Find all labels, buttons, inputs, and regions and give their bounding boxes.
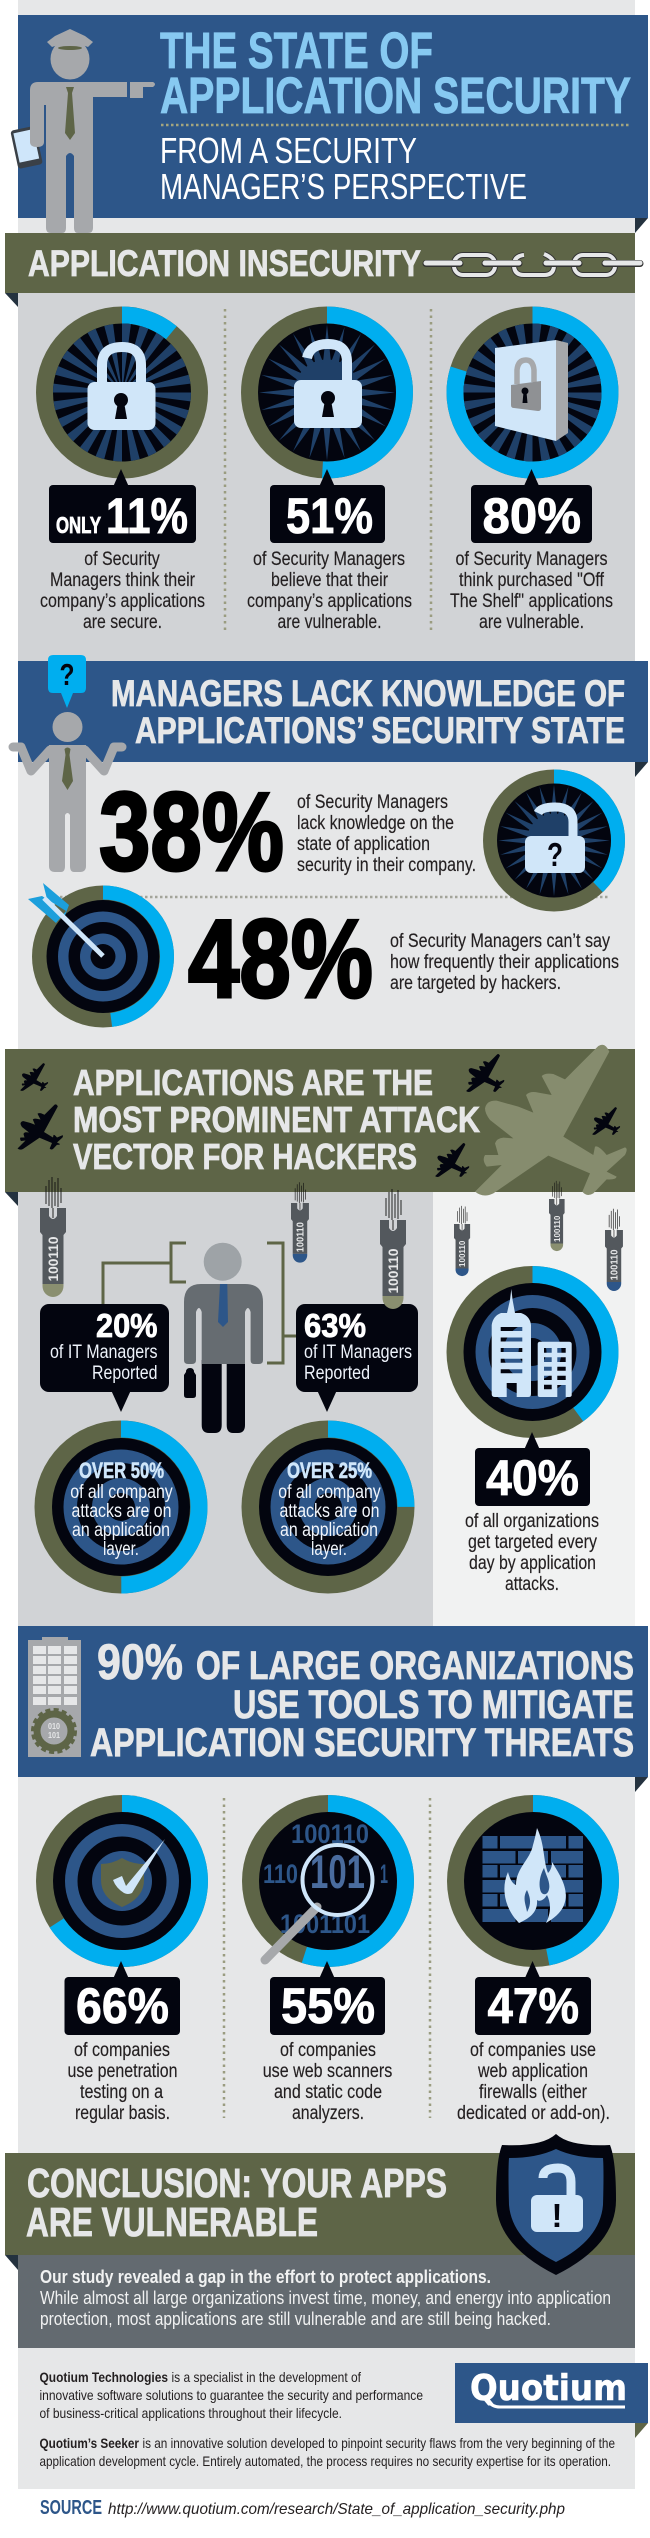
text block (263, 2040, 392, 2124)
callout: 55% (270, 1961, 385, 2035)
text block: of all organizations (465, 1511, 599, 1532)
icon: bomb overlapping the callout (380, 1189, 406, 1309)
icon: closed lock (88, 347, 156, 430)
text block: of companies (74, 2040, 170, 2061)
source line: SOURCE (40, 2497, 102, 2519)
text block: believe that their (271, 570, 389, 591)
text block: of Security Managers (297, 792, 448, 813)
logo: Quotium (455, 2363, 648, 2438)
donut: over 50%: an application (72, 1520, 170, 1541)
icon: large bomber (475, 1045, 627, 1195)
text block: of Security Managers (253, 549, 405, 570)
panel: 80% off the shelf (446, 306, 618, 633)
heading: ARE VULNERABLE (26, 2199, 318, 2245)
text block: of Security (84, 549, 160, 570)
callout: 47% (475, 1961, 591, 2035)
text block: use web scanners (263, 2061, 392, 2082)
text block: company’s applications (40, 591, 205, 612)
callout: only 11% (49, 469, 196, 544)
callout: only 11%: ONLY (56, 512, 101, 538)
callout: 66%: 66% (76, 1978, 169, 2034)
donut: 55% with binary: 101 (310, 1845, 365, 1898)
icon: building with gear (28, 1637, 81, 1757)
panel: managers lack knowledge banner (18, 661, 648, 777)
text block: about Quotium Technologies (40, 2369, 423, 2421)
stat: 48% (188, 897, 619, 1021)
text block: of Security Managers (456, 549, 608, 570)
heading (111, 673, 625, 751)
donut: over 25%: layer. (311, 1539, 347, 1560)
callout: 51% (270, 469, 385, 544)
callout: 40% (475, 1432, 590, 1506)
callout: 20% of IT managers: Reported (92, 1363, 158, 1384)
callout: 51%: 51% (286, 488, 373, 544)
text block: Managers think their (50, 570, 196, 591)
panel: 47% web application firewalls (447, 1795, 619, 2124)
text block: web application (477, 2061, 588, 2082)
donut: 66% with shield check (36, 1795, 208, 1967)
donut: 38% with question lock: ? (547, 836, 563, 873)
callout: 80% (471, 469, 592, 544)
text block: about Quotium's Seeker (40, 2435, 615, 2469)
callout: 20% of IT managers (40, 1304, 169, 1412)
icon: building with gear: 010 (48, 1722, 60, 1731)
donut: over 50%: layer. (103, 1539, 139, 1560)
donut: over 50% (34, 1420, 208, 1594)
panel: conclusion banner (5, 2153, 635, 2270)
panel: 90% use tools banner (18, 1626, 648, 1792)
donut: over 50%: of all company (70, 1482, 173, 1503)
text block (297, 792, 476, 876)
source line: http://www.quotium.com/research/State_of_application_security.php (108, 2501, 565, 2518)
callout: 20% of IT managers: 20% (96, 1307, 158, 1344)
text block: are vulnerable. (479, 612, 584, 633)
callout: 63% of IT managers (296, 1304, 418, 1412)
subtitle: MANAGER’S PERSPECTIVE (160, 166, 527, 207)
heading: CONCLUSION: YOUR APPS (27, 2160, 447, 2206)
donut: over 25% (242, 1420, 414, 1594)
text block: think purchased "Off (459, 570, 605, 591)
callout: 20% of IT managers: of IT Managers (50, 1342, 158, 1363)
text block: about Quotium Technologies: innovative software solutions to guarantee the security and performance (40, 2387, 423, 2403)
panel: title header (10, 15, 648, 233)
donut: 55% with binary: 110 (263, 1859, 298, 1889)
icon: manager with briefcase (184, 1243, 263, 1433)
stat: 38%: 38% (99, 770, 284, 894)
panel: attack vector banner (5, 1045, 635, 1206)
panel: conclusion text: Our study revealed a gap in the effort to protect applications. (40, 2267, 491, 2287)
icon: bomb: 100110 (295, 1222, 306, 1252)
text block: day by application (469, 1553, 596, 1574)
text block: lack knowledge on the (297, 813, 454, 834)
heading (26, 2160, 447, 2245)
text block: regular basis. (75, 2103, 170, 2124)
text block (450, 549, 613, 633)
donut: over 50%: attacks are on (72, 1501, 172, 1522)
text block: security in their company. (297, 855, 476, 876)
panel: 11% secure (36, 306, 208, 633)
panel: application insecurity banner (5, 233, 640, 307)
callout: 40%: 40% (486, 1450, 579, 1506)
donut: over 25%: of all company (278, 1482, 381, 1503)
callout: 55%: 55% (281, 1978, 375, 2034)
icon: bomb: 100110 (457, 1240, 467, 1267)
callout: 63% of IT managers: Reported (304, 1363, 370, 1384)
icon: bomb (291, 1182, 309, 1263)
callout: 80%: 80% (482, 488, 581, 544)
icon: bomb overlapping the callout: 100110 (385, 1248, 401, 1294)
icon: bomb (454, 1206, 470, 1276)
text block: The Shelf" applications (450, 591, 613, 612)
stat: 38% (99, 770, 476, 894)
text block (465, 1511, 599, 1595)
subtitle: FROM A SECURITY (160, 130, 417, 171)
icon: bomb: 100110 (609, 1250, 620, 1280)
icon: building with gear: 101 (48, 1731, 60, 1740)
callout: 47%: 47% (488, 1978, 579, 2034)
donut: over 25%: OVER 25% (287, 1458, 372, 1483)
panel: 66% penetration testing (36, 1795, 208, 2124)
donut: 38% with question lock (483, 770, 625, 912)
panel: 51% vulnerable (241, 306, 413, 633)
icon: software box (495, 340, 568, 441)
brackets: connectors from manager to callouts (103, 1243, 296, 1363)
heading (73, 1062, 480, 1177)
icon: bomb (549, 1181, 565, 1251)
icon: shrugging manager with question bubble (13, 655, 122, 872)
heading: MOST PROMINENT ATTACK (73, 1099, 480, 1140)
icon: open lock (294, 344, 362, 428)
icon: shield with open lock (496, 2134, 616, 2275)
donut: over 25%: attacks are on (280, 1501, 380, 1522)
donut: 55% with binary: 1001101 (280, 1909, 370, 1939)
text block: state of application (297, 834, 430, 855)
heading: APPLICATION INSECURITY (28, 243, 421, 284)
donut: 55% with binary: 1 (380, 1859, 388, 1889)
callout: only 11%: 11% (106, 488, 188, 544)
callout: 66% (64, 1961, 180, 2035)
icon: broken chain (426, 254, 640, 275)
icons: small bombers (18, 1054, 620, 1177)
text block: firewalls (either (479, 2082, 588, 2103)
text block (40, 549, 205, 633)
text block: testing on a (80, 2082, 163, 2103)
donut: over 50%: OVER 50% (79, 1458, 164, 1483)
text block: analyzers. (292, 2103, 364, 2124)
donut: 55% with binary: 100110 (291, 1819, 369, 1849)
text block: about Quotium's Seeker: Quotium’s Seeker (40, 2435, 139, 2451)
text block: of companies use (470, 2040, 596, 2061)
panel: 40% targeted every day (446, 1266, 618, 1595)
icon: security officer (10, 29, 155, 233)
text block: and static code (274, 2082, 382, 2103)
text block: about Quotium Technologies: of business-critical applications throughout their lifecycle. (40, 2405, 342, 2421)
logo: Quotium: Quotium (470, 2368, 627, 2409)
text block: are vulnerable. (278, 612, 382, 633)
heading: VECTOR FOR HACKERS (73, 1136, 417, 1177)
text block (247, 549, 412, 633)
title (160, 22, 631, 124)
text block: of Security Managers can’t say (390, 931, 610, 952)
text block: use penetration (68, 2061, 178, 2082)
icon: bomb (605, 1209, 623, 1291)
text block: get targeted every (468, 1532, 597, 1553)
callout: 63% of IT managers: 63% (304, 1307, 366, 1344)
panel: conclusion text (18, 2255, 635, 2348)
title: THE STATE OF (160, 22, 433, 79)
icon: shrugging manager with question bubble: ? (60, 657, 74, 692)
subtitle (160, 130, 527, 207)
text block (68, 2040, 178, 2124)
text block: are secure. (83, 612, 162, 633)
text block: are targeted by hackers. (390, 973, 561, 994)
text block: company’s applications (247, 591, 412, 612)
text block (457, 2040, 610, 2124)
callout: 63% of IT managers: of IT Managers (304, 1342, 412, 1363)
donut: 11% (36, 306, 208, 478)
icon: bomb (40, 1177, 66, 1297)
text block: about Quotium Technologies: is a specialist in the development of (172, 2369, 361, 2385)
donut: 40% with buildings (446, 1266, 618, 1438)
panel: conclusion text: protection, most applications are still vulnerable and are still being hacked. (40, 2309, 551, 2329)
icon: bomb: 100110 (552, 1215, 562, 1242)
donut: over 25%: an application (280, 1520, 378, 1541)
icon: target with arrow (28, 883, 174, 1028)
heading (90, 1634, 634, 1765)
text block: about Quotium Technologies: Quotium Technologies (40, 2369, 168, 2385)
donut: 47% with firewall (447, 1795, 619, 1967)
icon: shield with open lock: ! (552, 2197, 562, 2234)
source line (40, 2497, 565, 2519)
donut: 80% (446, 306, 618, 478)
icon: bomb: 100110 (45, 1236, 61, 1282)
panel: 55% web scanners (242, 1795, 414, 2124)
heading: 90% (97, 1634, 183, 1690)
text block (390, 931, 619, 994)
donut: 55% with binary (242, 1795, 414, 1967)
heading: APPLICATIONS ARE THE (73, 1062, 433, 1103)
text block: attacks. (505, 1574, 559, 1595)
donut: 51% (241, 306, 413, 478)
text block: dedicated or add-on). (457, 2103, 610, 2124)
stat: 48%: 48% (188, 897, 373, 1021)
text block: of companies (280, 2040, 376, 2061)
